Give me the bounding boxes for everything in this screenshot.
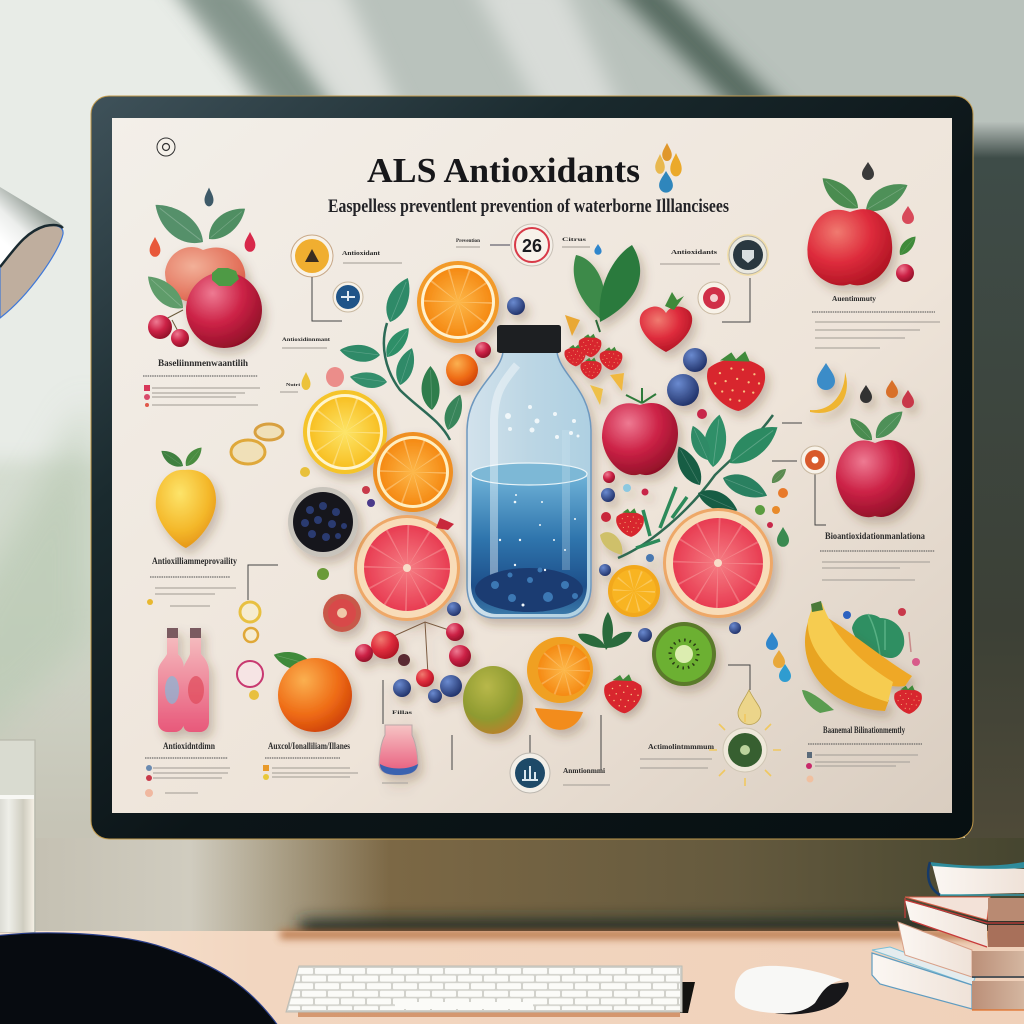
- dark leaves: [578, 612, 652, 650]
- water glass: [0, 740, 35, 932]
- keyboard: [286, 966, 695, 1017]
- label: top-left badge: [342, 251, 402, 263]
- text block: mid-left: Antioxilliammeprovaility: [152, 556, 237, 566]
- label: under blue badge: Antioxidinnmant: [282, 337, 330, 343]
- icon: dark badge with sun: [727, 234, 769, 276]
- subtitle: Easpelless preventlent prevention of waterborne Illlancisees: [328, 196, 729, 217]
- text block: top-right: [812, 294, 940, 348]
- orange half with wedge: [527, 637, 593, 730]
- icon: number 26 badge: 26: [522, 236, 542, 256]
- icon: small banana and drop: [810, 363, 914, 413]
- text block: top-left: Baseliinnmenwaantilih: [158, 358, 248, 368]
- book: second: [905, 897, 1024, 947]
- text block: bottom-left: Antioxidntdimn: [163, 741, 215, 751]
- small items: right of branch: [755, 466, 789, 547]
- bowl of blueberries: [288, 487, 358, 557]
- text block: top-right: Auentimmuty: [832, 294, 876, 303]
- label: yellow drop and pink fruit: Nutri: [286, 382, 301, 387]
- bottle: [467, 325, 591, 618]
- chair back: [0, 933, 281, 1024]
- text block: bottom-left: [145, 741, 230, 797]
- orange slice: middle: [373, 432, 453, 512]
- orange fruit: [271, 648, 352, 732]
- text block: mid-right: [820, 531, 935, 580]
- text block: bottom-centre-left: Auxcol/Ionalliliam/Illanes: [268, 741, 350, 751]
- text block: bottom-right: [806, 725, 922, 782]
- book: third: [898, 922, 1024, 977]
- text block: bottom-centre-left: [263, 741, 358, 780]
- grapefruit left: [354, 515, 460, 621]
- monitor frame: [91, 96, 973, 839]
- icon: number 26 badge: [511, 224, 553, 266]
- big leaves top centre: [574, 245, 640, 332]
- bottle cap: [497, 325, 561, 353]
- flask: Fillas: [392, 711, 412, 716]
- text block: mid-left: [147, 556, 237, 606]
- connector lines: top-left badges: [312, 277, 342, 321]
- desk: [0, 930, 1024, 1024]
- book: top: [928, 862, 1024, 895]
- icon: blue badge: [333, 282, 363, 312]
- apple right: [836, 406, 915, 517]
- label: number badge: [456, 239, 510, 247]
- green branch right: [616, 413, 784, 558]
- icon: orange warning badge: [291, 235, 333, 277]
- label: top right badge: Antioxidants: [671, 249, 718, 256]
- text block: bottom-right-centre: [640, 742, 715, 768]
- kiwi: [652, 622, 716, 686]
- sliced red fruit: [323, 594, 361, 632]
- label: teal badge: [563, 767, 610, 785]
- mango: [156, 444, 216, 548]
- label: right of number badge: Citrus: [562, 238, 586, 243]
- connector: top right badges: [722, 278, 750, 322]
- monitor screen: [112, 118, 952, 813]
- icon: orange badge with connector: [772, 423, 829, 525]
- text block: top-left: [143, 358, 260, 407]
- cherries and berries bottom centre: [355, 602, 471, 703]
- label: yellow drop and pink fruit: [280, 367, 344, 392]
- connector: bottom centre: [452, 715, 601, 770]
- label: number badge: Prevention: [456, 239, 480, 244]
- stack of books: [872, 862, 1024, 1010]
- small items: near bottle right: [599, 409, 707, 576]
- label: right of number badge: [562, 238, 602, 255]
- flask: [379, 680, 418, 783]
- mouse: [735, 966, 849, 1014]
- text block: bottom-right-centre: Actimolintmmmum: [648, 742, 715, 751]
- small golden shells: [231, 424, 454, 530]
- monitor shadow on the right wall: [965, 122, 1024, 842]
- label: teal badge: Anmtionmmi: [563, 767, 605, 775]
- icon: red badge: [698, 282, 730, 314]
- pink bottles: [158, 628, 209, 732]
- grapefruit right: [663, 508, 773, 618]
- heart-shaped apple: [640, 292, 692, 352]
- orange half right of bottle: [608, 565, 660, 617]
- small connector and drops bottom right: [728, 622, 791, 724]
- small corner badge: [157, 138, 175, 156]
- green branch: left: [339, 274, 467, 440]
- label: top-left badge: Antioxidant: [342, 251, 380, 257]
- book: bottom: [872, 947, 1024, 1010]
- blueberries and strawberry right: [667, 348, 765, 411]
- lemon slice: [303, 390, 387, 474]
- pear: [463, 666, 523, 734]
- strawberry bottom: [604, 674, 642, 713]
- wall below the monitor: [30, 838, 1024, 954]
- text block: bottom-right: Baanemal Bilinationmemtly: [823, 725, 905, 735]
- label: under blue badge: [282, 337, 330, 348]
- panel: top-left apples: [141, 188, 262, 348]
- small fruit: centre top: [446, 297, 525, 386]
- bananas: [802, 601, 922, 714]
- berries top centre: [564, 315, 624, 405]
- title: ALS Antioxidants: [367, 151, 640, 190]
- label: top right badge: [660, 249, 720, 264]
- lamp: [0, 187, 63, 318]
- icon: teal badge bottom: [510, 753, 550, 793]
- icon: green badge with sun: [709, 714, 781, 786]
- orange slice: top: [417, 261, 499, 343]
- connector: mid-left: [248, 565, 278, 600]
- text block: mid-right: Bioantioxidationmanlationa: [825, 531, 925, 541]
- icon: title water drops: [655, 143, 682, 193]
- small icons mid-left: [237, 568, 329, 700]
- panel: top-right apple: [807, 162, 919, 286]
- crimson apple centre right: [602, 388, 678, 475]
